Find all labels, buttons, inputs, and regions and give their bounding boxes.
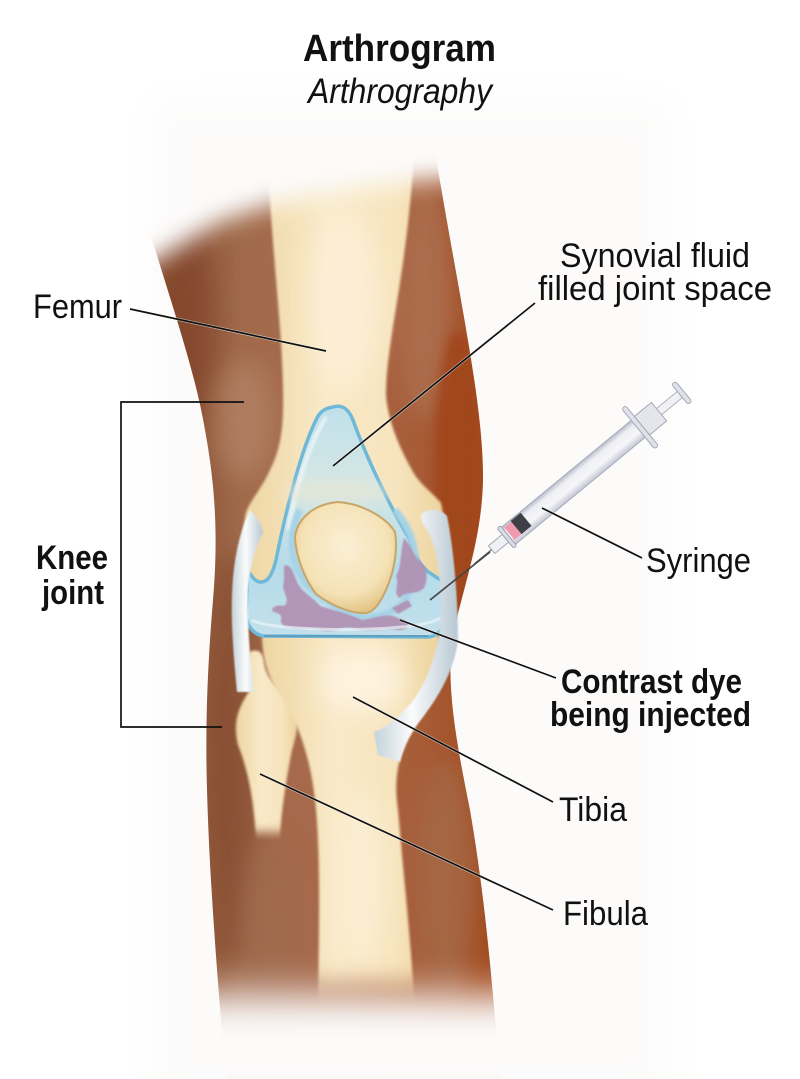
skin and femur fade group (152, 160, 496, 1028)
patella (295, 502, 396, 613)
label: knee joint: Knee (36, 539, 108, 577)
femur bone (242, 165, 444, 580)
right collateral ligament (374, 510, 458, 762)
label: knee joint: joint (41, 574, 104, 612)
label: femur: Femur (33, 288, 122, 326)
label: synovial fluid (538, 237, 772, 308)
syringe (458, 371, 700, 584)
label: contrast dye: being injected (550, 696, 751, 734)
contrast dye (272, 538, 427, 631)
illustration: knee anatomy (140, 160, 692, 1028)
title (303, 28, 496, 111)
tibia bone (262, 632, 441, 1030)
label: contrast dye (550, 663, 751, 734)
title: Arthrogram (303, 28, 496, 70)
label: synovial fluid: filled joint space (538, 270, 772, 308)
left collateral ligament (232, 510, 263, 692)
label: syringe: Syringe (646, 542, 751, 580)
leg skin (152, 160, 496, 1028)
label: tibia: Tibia (559, 791, 627, 829)
subtitle: Arthrography (306, 72, 494, 111)
label: synovial fluid: Synovial fluid (560, 237, 750, 275)
fibula bone (236, 650, 298, 840)
label: knee joint (36, 539, 108, 612)
label: fibula: Fibula (563, 895, 648, 933)
synovial fluid joint space (246, 406, 446, 637)
leader lines (121, 303, 642, 910)
label: contrast dye: Contrast dye (561, 663, 742, 701)
